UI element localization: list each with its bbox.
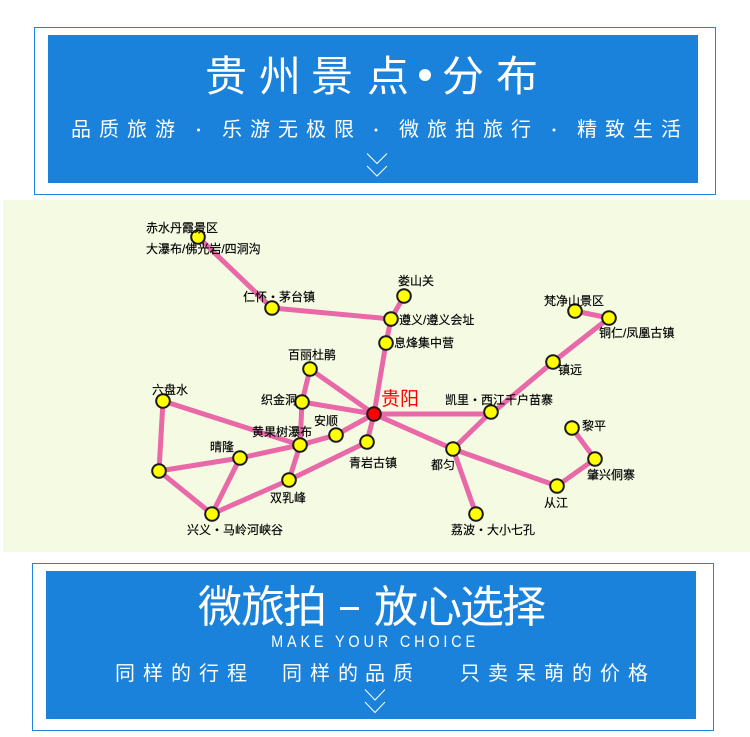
node: 遵义 xyxy=(384,312,398,326)
bottom blue background xyxy=(46,571,696,719)
label: 荔波: 荔波・大小七孔 xyxy=(451,523,535,537)
title: 贵州景点 xyxy=(205,53,409,100)
label: 息烽集中营: 息烽集中营 xyxy=(394,335,454,350)
node: 娄山关 xyxy=(397,289,411,303)
subtitle: 品质旅游乐游无极限微旅拍旅行精致生活 xyxy=(71,118,681,141)
label: 从江: 从江 xyxy=(544,496,568,510)
header frame xyxy=(34,28,716,194)
label: 赤水丹霞景区: 赤水丹霞景区 xyxy=(146,221,218,235)
label: 肇兴侗寨: 肇兴侗寨 xyxy=(587,467,635,482)
label: 六盘水: 六盘水 xyxy=(152,382,188,397)
label: 晴隆: 晴隆 xyxy=(210,439,234,454)
node: 黄果树 xyxy=(293,438,307,452)
bottom title: 微旅拍放心选择 xyxy=(198,583,546,632)
title right: 分布 xyxy=(442,53,538,100)
node: 青岩 xyxy=(360,435,374,449)
title dash xyxy=(340,607,359,610)
label: 梵净山景区: 梵净山景区 xyxy=(544,294,604,308)
label: 双乳峰: 双乳峰 xyxy=(270,491,306,505)
node: 肇兴 xyxy=(588,452,602,466)
header blue background xyxy=(48,35,698,183)
panel: bottom header xyxy=(32,564,714,730)
label: 仁怀茅台镇: 仁怀・茅台镇 xyxy=(243,289,315,304)
node: 息烽 xyxy=(379,336,393,350)
node: 赤水 xyxy=(191,230,205,244)
bottom frame xyxy=(32,564,714,730)
node: 凯里 xyxy=(484,405,498,419)
label: 贵阳: 贵阳 xyxy=(381,388,419,410)
label: 兴义马岭河峡谷: 兴义・马岭河峡谷 xyxy=(187,523,283,537)
map labels xyxy=(146,221,674,537)
node: 兴义 xyxy=(205,507,219,521)
label: 黎平: 黎平 xyxy=(582,419,606,433)
map nodes xyxy=(152,230,616,521)
label: 铜仁: 铜仁/凤凰古镇 xyxy=(599,325,674,340)
node: 从江 xyxy=(550,479,564,493)
label: 凯里: 凯里・西江千户苗寨 xyxy=(445,392,553,407)
map background xyxy=(3,200,750,552)
node: unnamed west xyxy=(152,464,166,478)
bottom tagline: 同样的行程同样的品质只卖呆萌的价格 xyxy=(115,662,648,685)
label: 镇远: 镇远 xyxy=(558,363,582,377)
node: 铜仁 xyxy=(602,311,616,325)
node: 仁怀 xyxy=(265,301,279,315)
label: 百丽杜鹃: 百丽杜鹃 xyxy=(288,347,336,362)
node: 镇远 xyxy=(546,355,560,369)
node: 双乳峰 xyxy=(282,473,296,487)
node: 贵阳 capital xyxy=(367,407,381,421)
subtitle separators xyxy=(197,128,556,132)
label: 都匀: 都匀 xyxy=(431,458,455,472)
node: 安顺 xyxy=(329,428,343,442)
english subtitle: MAKE YOUR CHOICE xyxy=(271,633,475,651)
route lines xyxy=(159,237,609,514)
title dot xyxy=(419,69,431,81)
label: 娄山关: 娄山关 xyxy=(398,273,434,288)
label: 安顺: 安顺 xyxy=(314,413,338,428)
node: 晴隆 xyxy=(233,451,247,465)
node: 都匀 xyxy=(446,442,460,456)
panel: top header xyxy=(34,28,716,194)
node: 百丽杜鹃 xyxy=(303,362,317,376)
label: 黄果树瀑布: 黄果树瀑布 xyxy=(252,424,312,439)
label: 青岩古镇: 青岩古镇 xyxy=(349,455,397,470)
label: 织金洞: 织金洞 xyxy=(261,392,297,407)
node: 织金洞 xyxy=(295,395,309,409)
label: 遵义: 遵义/遵义会址 xyxy=(399,312,474,327)
label: 大瀑布: 大瀑布/佛光岩/四洞沟 xyxy=(146,241,261,256)
node: 六盘水 xyxy=(156,394,170,408)
node: 荔波 xyxy=(469,507,483,521)
node: 梵净山 xyxy=(568,304,582,318)
node: 黎平 xyxy=(565,421,579,435)
panel: map xyxy=(3,200,750,552)
icon: double chevron down xyxy=(365,690,385,712)
icon: double chevron down xyxy=(367,154,387,176)
